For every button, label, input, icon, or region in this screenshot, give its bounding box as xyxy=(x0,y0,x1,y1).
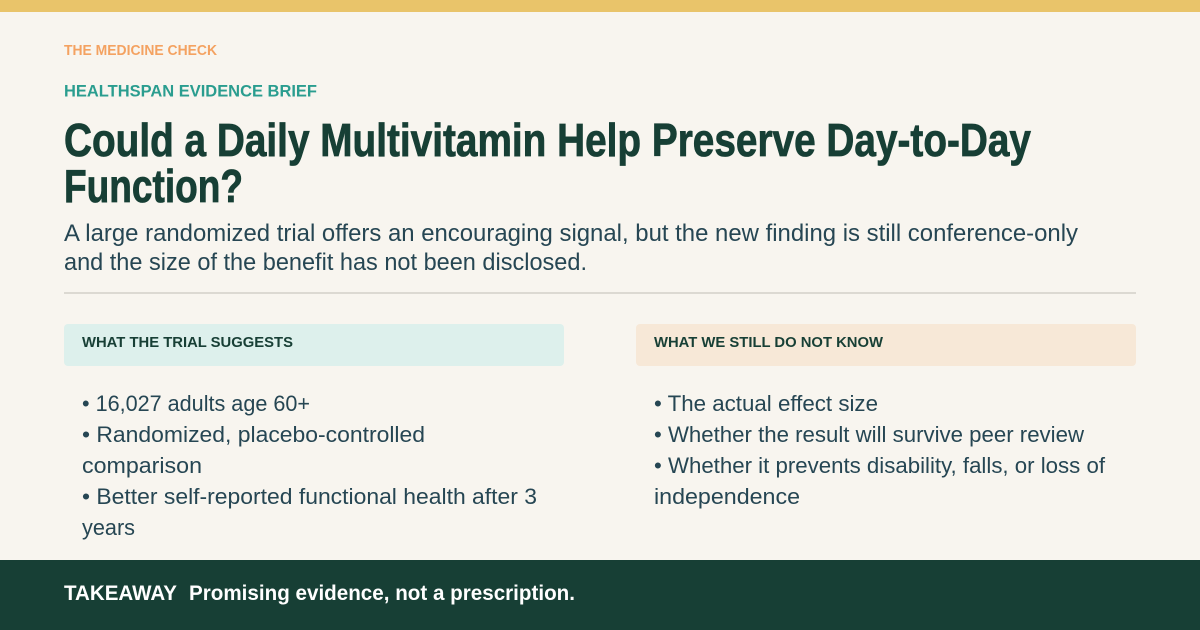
brand label: THE MEDICINE CHECK xyxy=(64,43,217,59)
bullet list: unknowns: • The actual effect size xyxy=(654,391,878,416)
top accent bar xyxy=(0,0,1200,12)
takeaway banner: Promising evidence, not a prescription. xyxy=(189,582,575,605)
panel header: trial xyxy=(64,324,564,366)
subtitle: A large randomized trial offers an encouraging signal, but the new finding is still conference-only xyxy=(64,220,1079,247)
bullet list: unknowns: • Whether it prevents disability, falls, or loss of xyxy=(654,453,1106,478)
title: Function? xyxy=(64,160,243,212)
bullet list: trial xyxy=(82,391,537,540)
bullet list: trial: • Better self-reported functional health after 3 xyxy=(82,484,537,509)
panel header: unknowns: WHAT WE STILL DO NOT KNOW xyxy=(654,335,883,351)
panel header: trial: WHAT THE TRIAL SUGGESTS xyxy=(82,335,293,351)
bullet list: trial: • 16,027 adults age 60+ xyxy=(82,391,310,416)
eyebrow heading: HEALTHSPAN EVIDENCE BRIEF xyxy=(64,82,317,100)
subtitle xyxy=(64,220,1079,276)
panel: what the trial suggests xyxy=(64,324,564,540)
bullet list: trial: • Randomized, placebo-controlled xyxy=(82,422,425,447)
bullet list: trial: comparison xyxy=(82,453,202,478)
divider xyxy=(64,292,1136,294)
bullet list: unknowns: • Whether the result will survive peer review xyxy=(654,422,1085,447)
takeaway banner: TAKEAWAY xyxy=(64,582,177,605)
bullet list: trial: years xyxy=(82,515,135,540)
takeaway banner xyxy=(0,560,1200,630)
panel: what we still do not know xyxy=(636,324,1136,509)
title: Could a Daily Multivitamin Help Preserve Day-to-Day xyxy=(64,114,1031,166)
subtitle: and the size of the benefit has not been disclosed. xyxy=(64,249,587,276)
bullet list: unknowns: independence xyxy=(654,484,800,509)
bullet list: unknowns xyxy=(654,391,1106,509)
title xyxy=(64,114,1031,212)
panel header: unknowns xyxy=(636,324,1136,366)
